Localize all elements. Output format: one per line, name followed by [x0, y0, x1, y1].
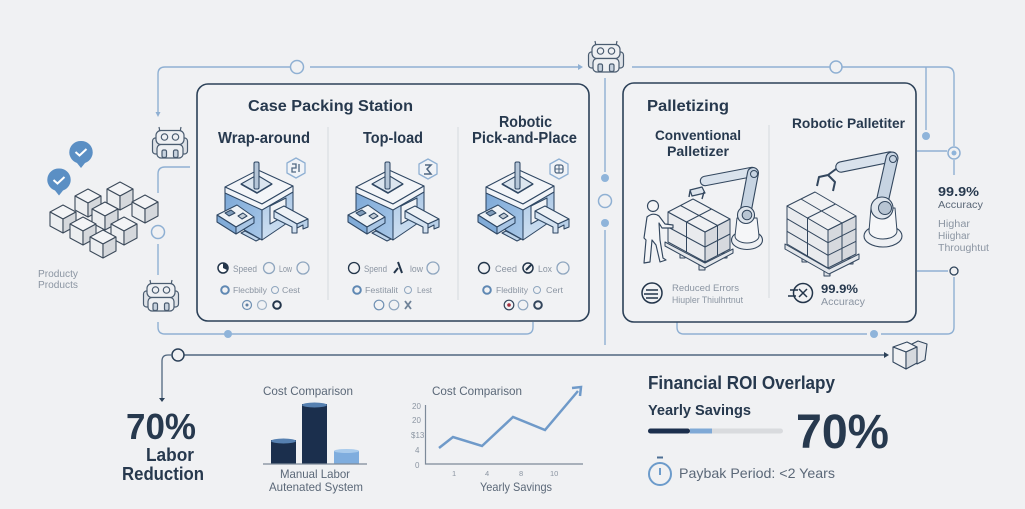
- column: robotic pick-and-place: Cert: [546, 285, 564, 295]
- metric: labor reduction: 70%: [126, 406, 196, 447]
- icon: product cubes: [50, 182, 158, 258]
- column: robotic pick-and-place: Pick-and-Place: [472, 130, 577, 147]
- icon: pallet stack right: [785, 192, 859, 276]
- panel: financial roi overlay: Yearly Savings: [648, 403, 751, 419]
- panel: financial roi overlay: [648, 373, 889, 485]
- metric: labor reduction: Labor: [146, 445, 194, 465]
- bar chart: cost comparison: Autenated System: [269, 480, 363, 494]
- product labels: Producty: [38, 268, 79, 280]
- accuracy text: 99.9%: [821, 282, 858, 296]
- column: top-load: low: [410, 264, 423, 274]
- column: robotic pick-and-place: Robotic: [499, 114, 552, 131]
- line chart: yearly savings: 20: [412, 402, 421, 411]
- line chart: yearly savings: Yearly Savings: [480, 480, 552, 494]
- column: wrap-around: Wrap-around: [218, 130, 310, 147]
- panel: financial roi overlay: Paybak Period: <2 Years: [679, 465, 835, 481]
- column: wrap-around: Low: [279, 264, 292, 274]
- panel: financial roi overlay: Financial ROI Overlapy: [648, 373, 835, 393]
- column: robotic palletizer: [785, 115, 906, 308]
- icon: robot top: [588, 41, 624, 72]
- icon: pallet stack left: [665, 199, 733, 270]
- side metric text: Throughtut: [938, 243, 989, 254]
- panel: case packing station: [197, 84, 589, 321]
- connector lines: [156, 64, 954, 345]
- metric: labor reduction: [122, 406, 204, 484]
- column: robotic pick-and-place: Ceed: [495, 264, 517, 274]
- heading: palletizing: Palletizing: [647, 98, 729, 115]
- icon: output box: [893, 341, 927, 369]
- line chart: yearly savings: 4: [415, 446, 420, 455]
- column: wrap-around: Cest: [282, 285, 301, 295]
- side metric text: [938, 185, 989, 254]
- heading: case packing station: Case Packing Station: [248, 98, 413, 115]
- column: conventional palletizer: Conventional: [655, 127, 741, 143]
- line chart: yearly savings: 10: [550, 469, 558, 478]
- icon: robot left upper: [152, 127, 188, 158]
- products group: [38, 141, 158, 291]
- icon: robot arm right: [817, 156, 902, 247]
- line chart: yearly savings: 8: [519, 469, 523, 478]
- column: top-load: Spend: [364, 264, 387, 274]
- column: conventional palletizer: Palletizer: [667, 143, 730, 159]
- column: robotic pick-and-place: Fledblity: [496, 285, 529, 295]
- icon: check pin upper: [69, 141, 93, 168]
- flow arrow: bottom line: [159, 349, 889, 402]
- panel: palletizing: [623, 83, 916, 322]
- product labels: [38, 268, 79, 291]
- connector nodes: [152, 60, 960, 338]
- bar chart: cost comparison: [263, 384, 367, 494]
- column: robotic pick-and-place: Lox: [538, 264, 552, 274]
- icon: robot arm left: [689, 170, 762, 250]
- column: robotic pick-and-place: [472, 114, 577, 310]
- column: wrap-around: Speed: [233, 264, 257, 274]
- icon: accuracy: [788, 284, 812, 302]
- column: top-load: Festitalit: [365, 285, 399, 295]
- reduced errors text: Reduced Errors: [672, 283, 739, 294]
- side metric text: Accuracy: [938, 199, 984, 211]
- icon: robot left lower: [144, 280, 178, 311]
- accuracy text: [821, 282, 865, 308]
- line chart: yearly savings: 0: [415, 461, 420, 470]
- icon: check pin lower: [47, 168, 71, 196]
- line chart: yearly savings: 20: [412, 416, 421, 425]
- column: top-load: Top-load: [363, 130, 423, 147]
- column: top-load: [348, 130, 439, 310]
- column: top-load: Lest: [417, 285, 433, 295]
- bar chart: cost comparison: Cost Comparison: [263, 384, 353, 398]
- side metric text: 99.9%: [938, 185, 979, 199]
- side metric text: Highar: [938, 219, 971, 230]
- icon: worker: [644, 200, 673, 263]
- icon: reduced errors: [642, 283, 662, 303]
- column: wrap-around: Flecbbily: [233, 285, 268, 295]
- line chart: yearly savings: $13: [411, 431, 425, 440]
- line chart: yearly savings: Cost Comparison: [432, 384, 522, 398]
- column: wrap-around: [217, 130, 310, 310]
- product labels: Products: [38, 279, 78, 291]
- side metric text: Hiighar: [938, 231, 971, 242]
- accuracy text: Accuracy: [821, 297, 865, 308]
- column: robotic palletizer: Robotic Palletiter: [792, 115, 906, 131]
- progress bar: [648, 428, 783, 434]
- column: conventional palletizer: [642, 127, 762, 306]
- line chart: yearly savings: [411, 384, 583, 494]
- metric: labor reduction: Reduction: [122, 464, 204, 484]
- line chart: yearly savings: 4: [485, 469, 489, 478]
- bar chart: cost comparison: Manual Labor: [280, 467, 350, 481]
- reduced errors text: Hiupler Thiulhrtnut: [672, 295, 743, 306]
- reduced errors text: [672, 283, 743, 306]
- panel: financial roi overlay: 70%: [796, 406, 889, 459]
- icon: stopwatch: [649, 458, 671, 485]
- line chart: yearly savings: 1: [452, 469, 456, 478]
